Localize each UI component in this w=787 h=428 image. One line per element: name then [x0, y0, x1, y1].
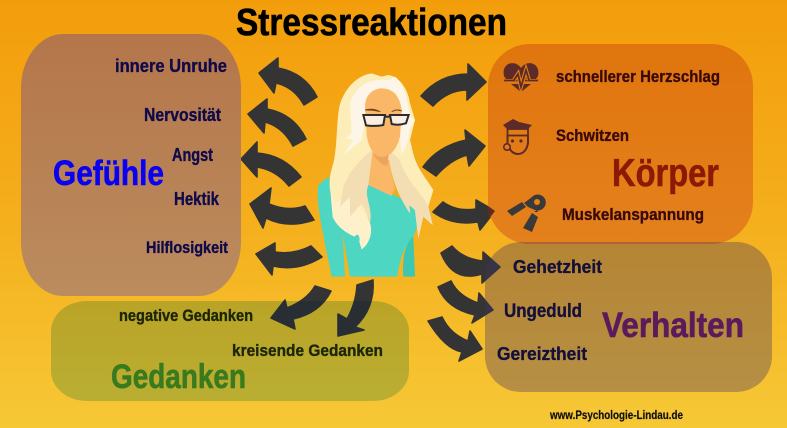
- illustration: woman with glasses: [318, 73, 433, 277]
- glasses: [363, 115, 409, 126]
- text: Gefühle: [53, 56, 228, 257]
- text: Verhalten: Gereiztheit: [497, 344, 587, 364]
- text: Verhalten: [497, 257, 744, 364]
- text: Gefühle: Nervosität: [144, 105, 221, 125]
- arrow: to schnellerer Herzschlag: [421, 64, 486, 106]
- icon: heart with pulse: [504, 63, 538, 92]
- arrow: to Hilflosigkeit: [256, 243, 322, 275]
- text: Verhalten: Ungeduld: [504, 301, 582, 322]
- hair strand left, pale: [331, 193, 371, 249]
- hair strand left, beige: [340, 150, 375, 223]
- arrow: to Angst: [241, 142, 301, 186]
- arrow: to negative Gedanken: [271, 286, 331, 329]
- text: Gedanken: negative Gedanken: [119, 307, 253, 325]
- panel: Körper: [488, 44, 753, 244]
- text: Körper: schnellerer Herzschlag: [556, 67, 720, 86]
- text: Gedanken: Gedanken: [111, 358, 246, 396]
- text: Verhalten: Verhalten: [602, 306, 744, 345]
- text: Körper: Körper: [612, 152, 719, 195]
- text: Gefühle: Gefühle: [53, 154, 164, 193]
- text: Verhalten: Gehetzheit: [513, 257, 602, 277]
- panel: Gedanken: [51, 301, 409, 401]
- arrows: [241, 58, 500, 361]
- icon: hand grip: [507, 195, 546, 232]
- hair strand right, beige: [387, 148, 433, 238]
- text: Körper: Muskelanspannung: [562, 205, 704, 224]
- text: Körper: Schwitzen: [556, 126, 629, 145]
- text: Gedanken: [111, 307, 383, 396]
- text: Gefühle: Angst: [172, 145, 213, 165]
- text: Gefühle: innere Unruhe: [115, 56, 227, 76]
- icon: sweating head with headband: [503, 119, 532, 154]
- hair highlight, white: [343, 77, 415, 155]
- top, teal: [318, 177, 417, 277]
- neck: [368, 150, 395, 196]
- arrow: to kreisende Gedanken: [338, 280, 373, 336]
- arrow: to Nervosität: [248, 99, 306, 146]
- text: Gefühle: Hilflosigkeit: [146, 238, 228, 257]
- text: Gedanken: kreisende Gedanken: [232, 342, 383, 360]
- right sleeve, darker: [403, 237, 415, 277]
- text: Gefühle: Hektik: [174, 189, 220, 209]
- eyebrows: [365, 109, 402, 112]
- hair silhouette: [330, 73, 433, 249]
- arrow: to Gehetzheit: [441, 246, 500, 283]
- arrow: to Ungeduld: [438, 281, 493, 323]
- panel: Gefühle: [21, 34, 241, 296]
- chin shadow: [373, 153, 389, 166]
- arrow: to Gereiztheit: [428, 317, 482, 361]
- arrow: to innere Unruhe: [259, 58, 317, 105]
- arrow: to Schwitzen: [423, 130, 485, 176]
- panel: Verhalten: [485, 242, 772, 392]
- panel tint: Verhalten: [485, 242, 772, 392]
- arrow: to Hektik: [250, 188, 314, 228]
- website footer: www.Psychologie-Lindau.de: [549, 408, 683, 422]
- arrow: to Muskelanspannung: [433, 200, 495, 230]
- text: Körper: [556, 67, 720, 224]
- arrow tip over Körper panel: [488, 206, 495, 220]
- face: [365, 88, 402, 157]
- title: Stressreaktionen: [236, 2, 507, 44]
